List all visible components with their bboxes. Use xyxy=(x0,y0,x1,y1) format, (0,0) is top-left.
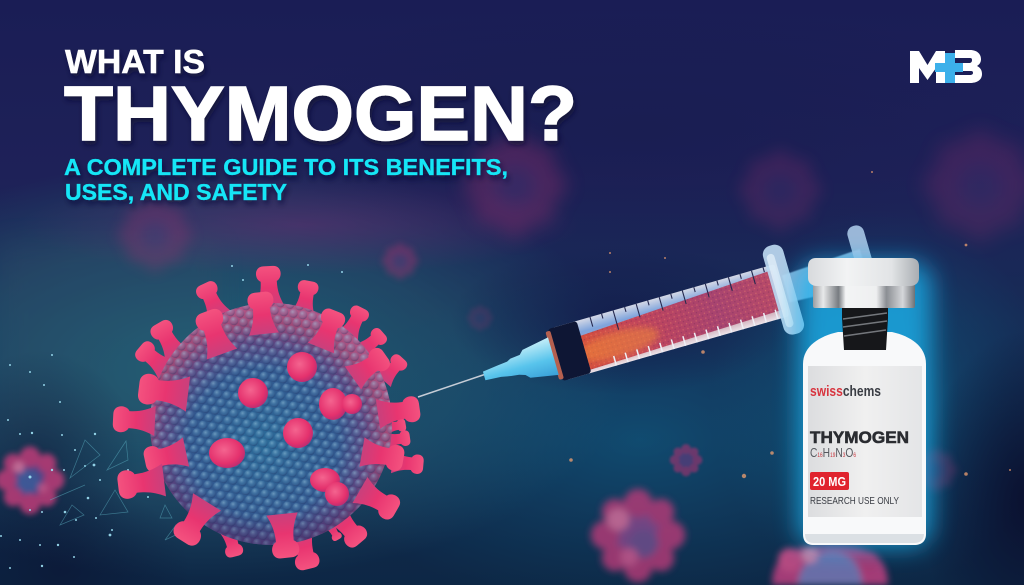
sphere body xyxy=(150,303,392,545)
logo: M+B xyxy=(910,50,982,83)
main virus xyxy=(112,265,424,572)
vial metal ring xyxy=(813,284,915,308)
syringe plunger xyxy=(774,223,885,329)
subtitle: A COMPLETE GUIDE TO ITS BENEFITS, xyxy=(64,154,508,180)
syringe xyxy=(471,220,886,420)
dose badge: 20 MG xyxy=(813,474,846,489)
syringe rubber stopper xyxy=(548,321,591,381)
syringe scale marks xyxy=(590,267,769,336)
research note: RESEARCH USE ONLY xyxy=(810,495,899,507)
blurred background viruses xyxy=(0,130,1024,585)
front-facing spikes xyxy=(209,352,362,506)
bottom blurred virus xyxy=(772,545,888,585)
vial neck xyxy=(842,305,888,350)
back spikes xyxy=(131,265,424,572)
product name: THYMOGEN xyxy=(810,428,909,447)
vial glow xyxy=(798,262,932,547)
vial cap xyxy=(808,258,919,286)
brand: swisschems xyxy=(810,384,881,400)
chemical formula: C16H19N3O6 xyxy=(810,445,857,460)
subtitle: USES, AND SAFETY xyxy=(65,179,287,205)
particles and wireframe triangles xyxy=(0,171,1011,569)
subtitle xyxy=(64,154,508,205)
vial body xyxy=(803,332,926,545)
title xyxy=(64,43,577,157)
syringe fluid xyxy=(568,270,785,373)
front spikes xyxy=(112,291,422,560)
vial xyxy=(803,258,926,545)
title line: thymogen: THYMOGEN? xyxy=(64,71,577,157)
syringe hub xyxy=(479,337,559,395)
title line: what is: WHAT IS xyxy=(65,43,205,80)
syringe barrel xyxy=(552,264,789,380)
vial label xyxy=(808,366,922,517)
needle xyxy=(418,374,486,397)
syringe flange xyxy=(761,243,806,337)
